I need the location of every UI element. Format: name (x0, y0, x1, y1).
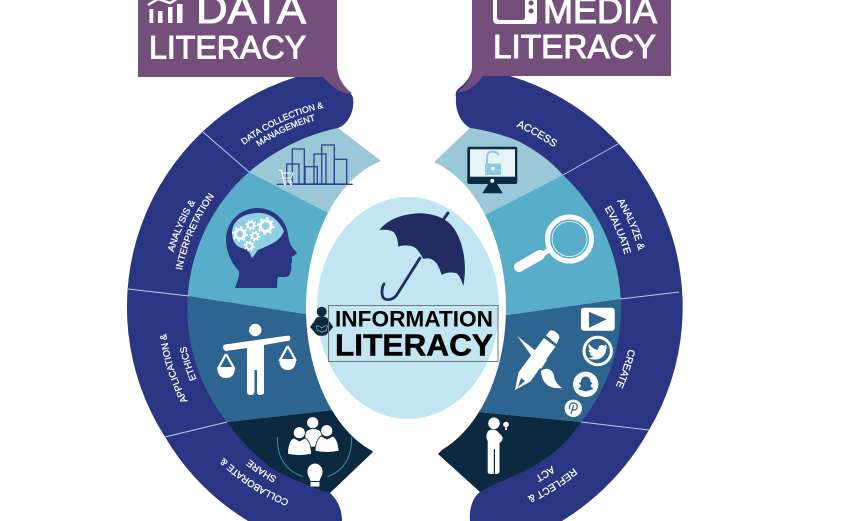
icon: thinking person (486, 418, 509, 474)
label: access: ACCESS (516, 120, 558, 146)
wedge: data collection (240, 120, 406, 214)
label: analysis and interpretation: INTERPRETATION (176, 192, 214, 270)
label: create: CREATE (616, 350, 635, 389)
wedge: reflect (438, 412, 590, 492)
text: LITERACY: LITERACY (493, 28, 656, 65)
label: analyze and evaluate: ANALYZE & (617, 200, 645, 250)
icon: monitor with padlock (467, 147, 517, 193)
circle: information literacy background (317, 197, 499, 419)
icon: snapchat (573, 372, 598, 397)
label: reflect and act: ACT (537, 466, 554, 482)
label: reflect and act: REFLECT & (527, 468, 578, 502)
separator lines (128, 132, 679, 437)
icon: bar chart with shopping cart (277, 145, 353, 184)
icon: twitter (584, 337, 611, 365)
text: LITERACY: LITERACY (149, 30, 306, 66)
icon: video play (581, 308, 615, 331)
icon: television (493, 0, 537, 24)
label: application and ethics: ETHICS (180, 346, 196, 382)
outer band: data literacy (127, 67, 353, 521)
label: data collection and management: MANAGEMENT (256, 114, 314, 146)
icon: magnifying glass (519, 217, 592, 267)
heading: data literacy (138, 0, 352, 93)
wedge: application (170, 295, 406, 423)
wedge: create (406, 298, 640, 423)
label: collaborate and share: COLLABORATE & (220, 458, 288, 506)
icon: head with gears (226, 208, 297, 288)
text: LITERACY: LITERACY (335, 328, 493, 363)
panel: data literacy wheel (127, 67, 406, 521)
icon: group of people with lightbulb (277, 417, 352, 486)
icon: bar chart (148, 0, 182, 23)
icon: person reading (310, 307, 333, 336)
wedge: collaborate (215, 410, 373, 493)
panel: media literacy wheel (406, 67, 683, 521)
outer band: media literacy (456, 67, 683, 521)
icon: person balancing scales (217, 324, 296, 395)
heading: media literacy (457, 0, 671, 92)
wedge: analyze (406, 170, 640, 315)
label: analysis and interpretation: ANALYSIS & (168, 200, 196, 252)
label: data collection and management: DATA COLLECTION & (240, 102, 324, 145)
label: collaborate and share: SHARE (246, 459, 276, 482)
lens: white central gap (306, 156, 506, 460)
label: analyze and evaluate: EVALUATE (604, 205, 632, 254)
label: analyze and evaluate (604, 200, 645, 254)
icon: pinterest (565, 400, 582, 417)
text: INFORMATION: INFORMATION (335, 307, 493, 332)
title: information literacy (328, 306, 498, 363)
wedge: access (406, 120, 572, 217)
label: application and ethics: APPLICATION & (160, 334, 188, 402)
wedge: analysis (170, 167, 406, 314)
icon: umbrella (379, 213, 465, 300)
icon: pencil and brush (515, 330, 562, 390)
